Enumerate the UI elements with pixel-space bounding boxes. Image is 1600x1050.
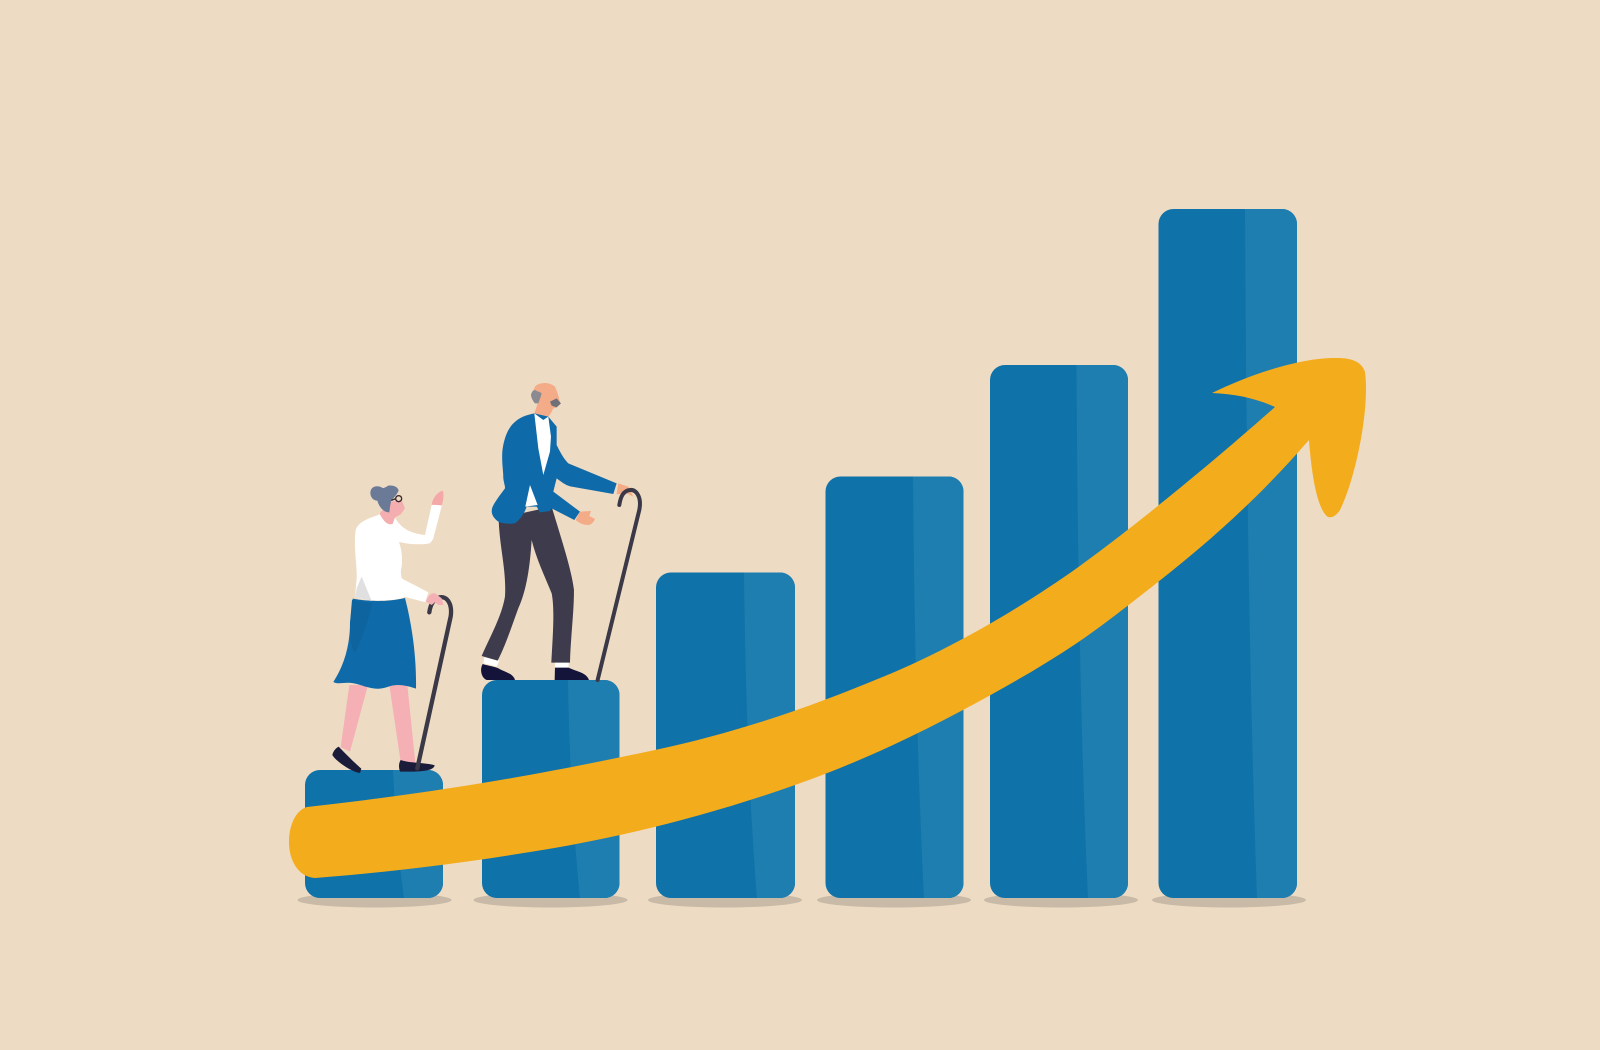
hair — [370, 485, 399, 512]
shirt — [525, 413, 551, 507]
far hand — [617, 483, 633, 497]
shoes — [332, 747, 435, 773]
top shade — [355, 577, 372, 601]
bar 3 — [656, 572, 795, 898]
skirt shade — [350, 600, 373, 653]
figure: elderly woman with cane — [332, 485, 451, 773]
jacket — [492, 413, 617, 524]
top — [355, 505, 442, 602]
growth arrow — [289, 358, 1366, 878]
socks — [483, 657, 569, 669]
glasses — [391, 496, 402, 502]
bar 6 — [1158, 209, 1297, 898]
neck and face — [380, 500, 405, 525]
raised hand — [432, 491, 444, 505]
bar 4 — [826, 476, 964, 898]
near hand — [576, 511, 595, 525]
hand on cane — [426, 593, 443, 605]
cane — [417, 597, 451, 768]
neck and face — [532, 383, 560, 421]
skirt — [333, 598, 416, 689]
hair — [531, 390, 542, 403]
bar chart — [298, 209, 1306, 908]
bar 2 — [482, 680, 620, 898]
shoes — [481, 664, 589, 680]
trousers — [482, 507, 574, 663]
beard — [550, 398, 561, 407]
legs — [341, 685, 415, 763]
bar 1 — [305, 770, 443, 898]
cane — [598, 490, 640, 680]
bar shadows — [298, 892, 1306, 908]
bar 5 — [990, 365, 1128, 898]
figure: elderly man with cane — [481, 383, 640, 680]
